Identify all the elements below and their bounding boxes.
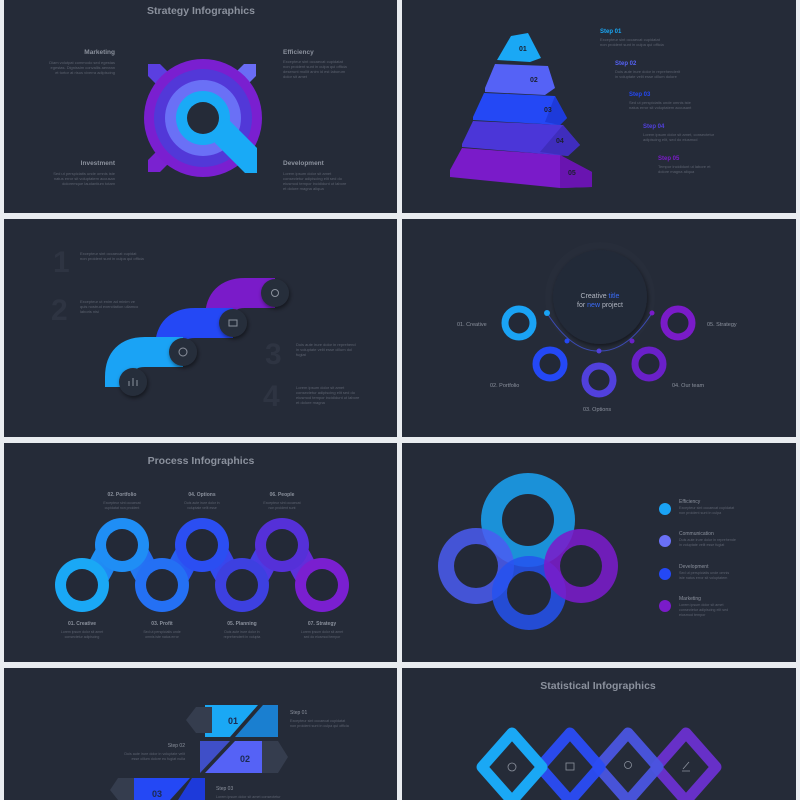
big numbers (51, 246, 282, 413)
checklist: Marketing (679, 596, 701, 602)
checklist: Efficiency (679, 499, 701, 505)
step texts: Tempor incididunt ut labore et (658, 164, 711, 169)
blocks (110, 705, 288, 800)
step texts: Step 01 (600, 29, 622, 35)
checklist: Lorem ipsum dolor sit amet (679, 603, 723, 607)
process labels: Lorem ipsum dolor sit amet (61, 630, 103, 634)
number texts: Excepteur ut enim ad minim ve (80, 299, 136, 304)
step texts: Lorem ipsum dolor sit amet consectetur (216, 795, 281, 799)
checklist: Development (679, 564, 709, 570)
checklist: non proident sunt in culpa (679, 511, 722, 515)
checklist: Duis aute irure dolor in reprehende (679, 538, 736, 542)
text: efficiency: dolor sit amet (283, 74, 308, 79)
pyramid: 02 (530, 77, 538, 84)
target icon (144, 59, 262, 177)
blocks: 01 (228, 716, 238, 726)
text: efficiency: Excepteur sint occaecat cupidatat (283, 59, 344, 64)
rings (505, 309, 692, 394)
step texts (600, 29, 715, 174)
pyramid: 03 (544, 107, 552, 114)
panel: ribbon steps (4, 219, 397, 437)
labels: 04. Our team (672, 383, 705, 389)
step texts: dolore magna aliqua (658, 169, 695, 174)
text: development: Development (283, 160, 325, 167)
blocks: 02 (240, 754, 250, 764)
step texts: Step 03 (629, 92, 651, 98)
step texts: Excepteur sint occaecat cupidatat (290, 719, 345, 723)
title: Process Infographics: Process Infographics (148, 455, 255, 467)
big numbers: 4 (263, 380, 280, 413)
process labels: Duis aute irure dolor in (224, 630, 260, 634)
process labels: 04. Options (188, 492, 216, 498)
step texts: Duis aute irure dolor in voluptate velit (124, 752, 185, 756)
number texts: quis nostrud exercitation ullamco (80, 304, 139, 309)
process labels: 02. Portfolio (108, 492, 136, 498)
process labels: reprehenderit in volupta (224, 635, 260, 639)
labels: 02. Portfolio (490, 383, 519, 389)
process labels: 01. Creative (68, 621, 96, 627)
step texts: esse cillum dolore eu fugiat nulla (132, 757, 186, 761)
process labels: 03. Profit (151, 621, 173, 627)
text: development: et dolore magna aliqua (283, 186, 324, 191)
number texts: eiusmod tempor incididunt ut labore (296, 395, 360, 400)
text: efficiency (283, 49, 348, 79)
number texts: consectetur adipiscing elit sed do (296, 390, 356, 395)
labels (457, 322, 737, 413)
arc connector (547, 313, 652, 351)
number texts (80, 251, 360, 405)
panel: process (4, 443, 397, 662)
process labels: Lorem ipsum dolor sit amet (301, 630, 343, 634)
text: development: consectetur adipiscing elit sed do (283, 176, 343, 181)
step texts: Step 03 (216, 786, 233, 792)
number texts: in voluptate velit esse cillum dol (296, 347, 352, 352)
pyramid: 04 (556, 138, 564, 145)
text: marketing: Marketing (84, 49, 115, 56)
text: efficiency: Efficiency (283, 49, 314, 56)
checklist: Excepteur sint occaecat cupidatat (679, 506, 734, 510)
panel: statistical (402, 668, 796, 800)
process labels: 06. People (270, 492, 295, 498)
text: efficiency: deserunt mollit anim id est laborum (283, 69, 346, 74)
number texts: fugiat (296, 352, 307, 357)
title: Strategy Infographics: Strategy Infographics (147, 5, 255, 17)
text: development: eiusmod tempor incididunt ut labore (283, 181, 347, 186)
big numbers: 1 (53, 246, 70, 279)
text: investment: doloremque laudantium totam (62, 181, 116, 186)
checklist (659, 499, 736, 617)
text: development: Lorem ipsum dolor sit amet (283, 171, 332, 176)
panel: steps blocks (4, 668, 397, 800)
number texts: Excepteur sint occaecat cupidat (80, 251, 137, 256)
blocks: 03 (152, 789, 162, 799)
diamonds (482, 733, 716, 800)
number texts: Lorem ipsum dolor sit amet (296, 385, 345, 390)
step texts: adipiscing elit, sed do eiusmod (643, 137, 697, 142)
panel: pyramid (402, 0, 796, 213)
step texts: Excepteur sint occaecat cupidatat (600, 37, 661, 42)
labels: 03. Options (583, 407, 611, 413)
process labels: Excepteur sint occaecat (103, 501, 141, 505)
checklist: iste natus error sit voluptatem (679, 576, 727, 580)
chain (55, 518, 349, 612)
process labels: voluptate velit esse (187, 506, 217, 510)
text: marketing: egestas. Dignissim convallis aenean (51, 65, 115, 70)
step texts: natus error sit voluptatem accusant (629, 105, 692, 110)
step texts: Step 02 (615, 61, 637, 67)
text: investment: Sed ut perspiciatis unde omnis iste (53, 171, 116, 176)
step texts: Sed ut perspiciatis unde omnis iste (629, 100, 692, 105)
step texts: non proident sunt in culpa qui officia (290, 724, 350, 728)
labels: 01. Creative (457, 322, 487, 328)
step texts: Step 01 (290, 710, 307, 716)
text: investment: natus error sit voluptatem accusan (54, 176, 115, 181)
process labels: Duis aute irure dolor in (184, 501, 220, 505)
process labels: consectetur adipiscing (65, 635, 99, 639)
process labels: 05. Planning (227, 621, 257, 627)
pyramid: 01 (519, 46, 527, 53)
panel: strategy (4, 0, 397, 213)
big numbers: 3 (265, 338, 282, 371)
ribbons (119, 279, 289, 396)
big numbers: 2 (51, 294, 68, 327)
step texts: Step 05 (658, 156, 680, 162)
step texts (124, 710, 350, 799)
center circle (545, 242, 655, 352)
checklist: eiusmod tempor (679, 613, 706, 617)
checklist: Sed ut perspiciatis unde omnis (679, 571, 729, 575)
center circle: Creative title (581, 293, 620, 300)
step texts: Lorem ipsum dolor sit amet, consectetur (643, 132, 715, 137)
checklist: in voluptate velit esse fugiat (679, 543, 724, 547)
text: investment: Investment (81, 160, 116, 167)
step texts: Duis aute irure dolor in reprehenderit (615, 69, 681, 74)
number texts: non proident sunt in culpa qui officia (80, 256, 145, 261)
labels: 05. Strategy (707, 322, 737, 328)
process labels: omnis iste natus error (145, 635, 180, 639)
process labels: 07. Strategy (308, 621, 336, 627)
checklist: Communication (679, 531, 714, 537)
step texts: non proident sunt in culpa qui officia (600, 42, 665, 47)
process labels: Excepteur sint occaecat (263, 501, 301, 505)
pyramid (450, 33, 592, 188)
process labels (61, 492, 343, 639)
number texts: Duis aute irure dolor in reprehend (296, 342, 356, 347)
text: marketing (49, 49, 115, 75)
title: Statistical Infographics: Statistical Infographics (540, 680, 656, 692)
pyramid: 05 (568, 170, 576, 177)
center circle: for new project (577, 302, 623, 309)
number texts: et dolore magna (296, 400, 326, 405)
venn rings (438, 473, 618, 630)
step texts: Step 04 (643, 124, 665, 130)
panel: creative radial (402, 219, 796, 437)
text: efficiency: non proident sunt in culpa qui officia (283, 64, 348, 69)
process labels: cupidatat non proident (105, 506, 139, 510)
step texts: Step 02 (168, 743, 185, 749)
process labels: Sed ut perspiciatis unde (143, 630, 181, 634)
text: investment (53, 160, 116, 186)
number texts: laboris nisi (80, 309, 99, 314)
panel: overlapping circles (402, 443, 796, 662)
process labels: non proident sunt (268, 506, 296, 510)
process labels: sed do eiusmod tempor (304, 635, 341, 639)
text: marketing: Diam volutpat commodo sed egestas (49, 60, 115, 65)
text: marketing: et tortor at risus viverra adipiscing (55, 70, 115, 75)
step texts: in voluptate velit esse cillum dolore (615, 74, 678, 79)
text: development (283, 160, 347, 191)
checklist: consectetur adipiscing elit sed (679, 608, 728, 612)
